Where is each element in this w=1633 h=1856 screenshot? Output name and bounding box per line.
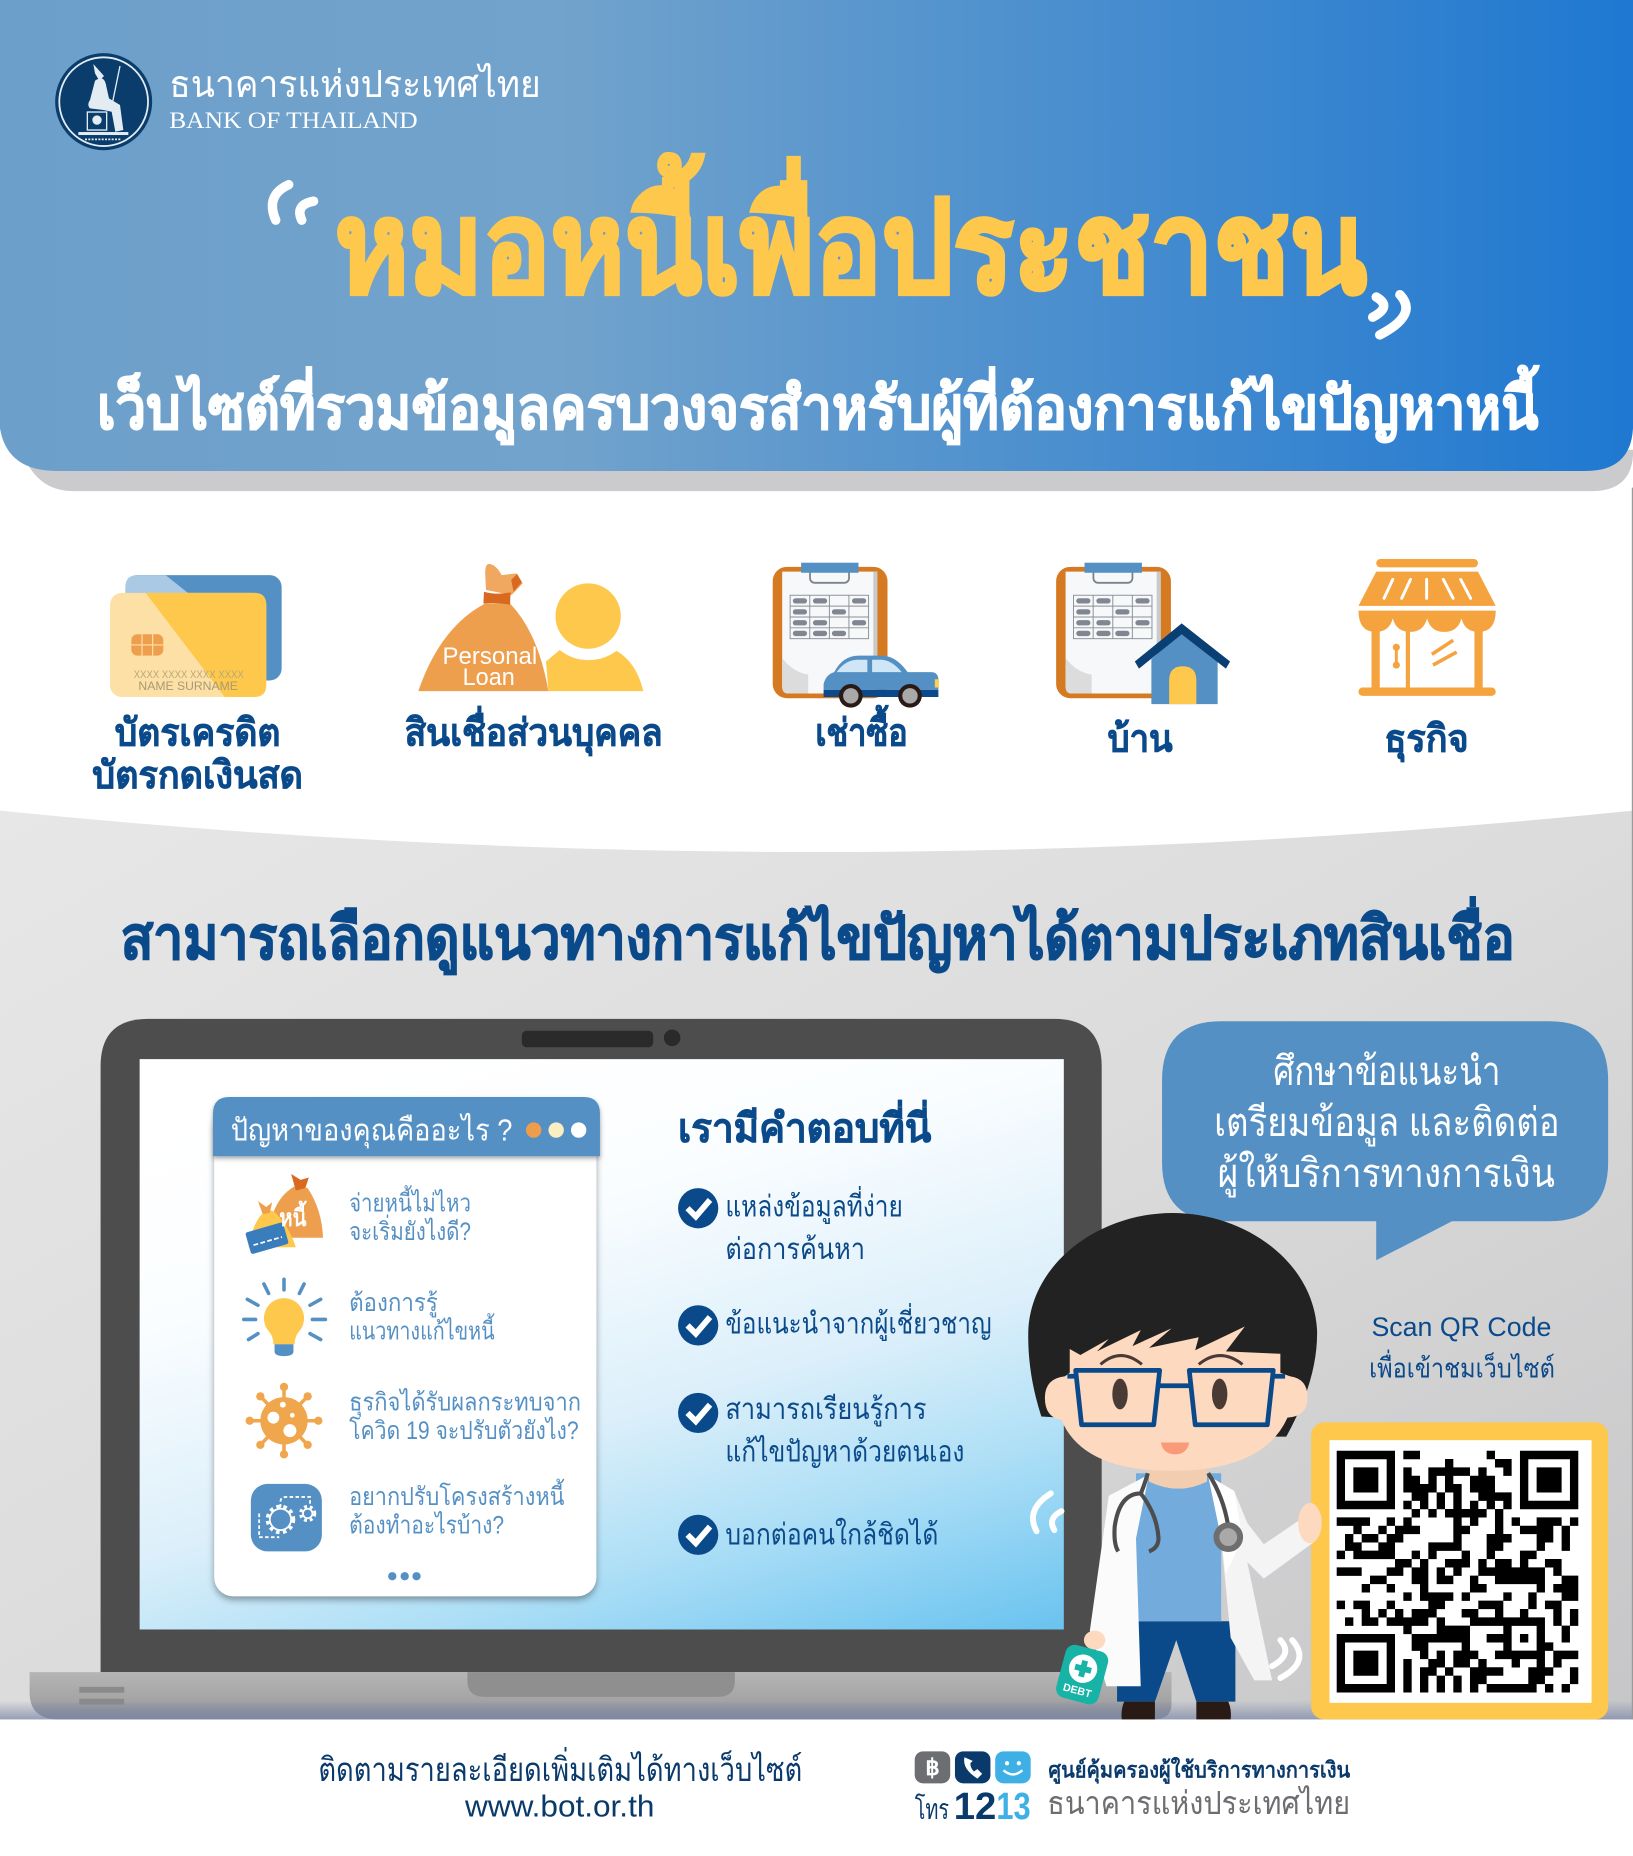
icon: phone	[955, 1751, 990, 1783]
label: hire purchase: เช่าซื้อ	[815, 705, 908, 755]
lab coat	[1090, 1474, 1316, 1686]
check item 1: ต่อการค้นหา	[725, 1233, 865, 1266]
icon: debt restructuring gears	[251, 1484, 322, 1551]
loan type: credit card	[92, 575, 303, 797]
subtitle: เว็บไซต์ที่รวมข้อมูลครบวงจรสำหรับผู้ที่ต้องการแก้ไขปัญหาหนี้	[97, 364, 1540, 444]
panel: header banner	[0, 0, 1633, 471]
title: หมอหนี้เพื่อประชาชน	[335, 152, 1367, 320]
medical bag	[1054, 1643, 1110, 1707]
opening quote mark	[272, 185, 314, 220]
label: credit card line 1: บัตรเครดิต	[115, 713, 280, 755]
footer: customer centre	[1047, 1756, 1351, 1821]
speech bubble: ผู้ให้บริการทางการเงิน	[1218, 1150, 1555, 1198]
hair	[1028, 1213, 1317, 1437]
icon: credit cards	[110, 575, 282, 697]
footer: customer centre: ศูนย์คุ้มครองผู้ใช้บริการทางการเงิน	[1048, 1756, 1351, 1784]
logo text: English bank name: BANK OF THAILAND	[169, 108, 418, 134]
mouth	[1161, 1443, 1189, 1454]
face	[1045, 1327, 1308, 1471]
laptop	[30, 1019, 1171, 1719]
speech bubble: ศึกษาข้อแนะนำ	[1273, 1049, 1500, 1094]
icon: money bag and person: Personal	[443, 644, 537, 670]
item text: restructure debt: อยากปรับโครงสร้างหนี้	[349, 1479, 565, 1511]
check item 2: ข้อแนะนำจากผู้เชี่ยวชาญ	[725, 1303, 992, 1342]
footer: hotline number: 12	[954, 1786, 996, 1828]
loan type: hire purchase	[773, 563, 939, 755]
eyebrows	[1100, 1356, 1242, 1364]
check item 2	[678, 1303, 992, 1345]
scan QR caption	[1369, 1311, 1555, 1383]
footer: website text: www.bot.or.th	[464, 1788, 654, 1823]
logo: Bank of Thailand seal	[55, 53, 152, 150]
card header title: ปัญหาของคุณคืออะไร ?	[231, 1113, 512, 1150]
icon: clipboard with house	[1056, 563, 1230, 704]
footer: hotline number: โทร	[915, 1793, 949, 1826]
icon: clipboard with car	[773, 563, 939, 708]
item text: can't pay debt: จ่ายหนี้ไม่ไหว	[349, 1186, 471, 1218]
icon: credit cards: XXXX XXXX XXXX XXXX	[134, 669, 244, 681]
footer: hotline icons	[915, 1751, 1031, 1783]
scan QR caption: Scan QR Code	[1371, 1311, 1551, 1342]
speech bubble: เตรียมข้อมูล และติดต่อ	[1214, 1100, 1560, 1147]
icon: debt bags	[245, 1174, 323, 1254]
bottom edge shading	[0, 1700, 1633, 1719]
item text: restructure debt	[349, 1479, 565, 1540]
more dots	[388, 1572, 421, 1580]
hand with bag	[1084, 1631, 1105, 1650]
panel: answers	[678, 1099, 992, 1555]
item text: want to know: ต้องการรู้	[349, 1290, 438, 1318]
right edge line	[1631, 488, 1633, 1719]
footer: hotline number	[915, 1786, 1031, 1828]
check item 3	[678, 1393, 964, 1468]
logo text: Thai bank name: ธนาคารแห่งประเทศไทย	[169, 63, 541, 106]
card header dots	[526, 1122, 586, 1138]
check item 3: สามารถเรียนรู้การ	[725, 1393, 927, 1427]
QR code	[1311, 1422, 1608, 1719]
icon: virus	[246, 1383, 322, 1458]
card body	[214, 1106, 596, 1596]
label: personal loan: สินเชื่อส่วนบุคคล	[405, 706, 663, 757]
answers heading: เรามีคำตอบที่นี่	[678, 1099, 932, 1151]
check item 4: บอกต่อคนใกล้ชิดได้	[725, 1517, 938, 1551]
laptop camera	[522, 1030, 680, 1047]
check item 3: แก้ไขปัญหาด้วยตนเอง	[725, 1434, 964, 1468]
eyes	[1112, 1379, 1227, 1409]
footer: website text: ติดตามรายละเอียดเพิ่มเติมได้ทางเว็บไซต์	[318, 1747, 802, 1789]
icon: shop front	[1358, 559, 1496, 696]
icon: light bulb	[244, 1279, 325, 1356]
icon: credit cards: NAME SURNAME	[138, 679, 238, 693]
legs	[1117, 1621, 1235, 1702]
footer: customer centre: ธนาคารแห่งประเทศไทย	[1047, 1785, 1350, 1821]
label: credit card line 2: บัตรกดเงินสด	[92, 755, 303, 797]
item text: business impacted	[349, 1388, 581, 1445]
loan type: business	[1358, 559, 1496, 762]
label: home: บ้าน	[1108, 718, 1173, 760]
loan type: home	[1056, 563, 1230, 760]
neck	[1149, 1467, 1207, 1489]
check item 1: แหล่งข้อมูลที่ง่าย	[725, 1185, 903, 1224]
shirt	[1136, 1473, 1221, 1621]
panel: problem card	[213, 1097, 600, 1596]
icon: smile	[995, 1751, 1031, 1783]
footer: website text	[318, 1747, 802, 1823]
hand on QR	[1298, 1503, 1322, 1543]
check item 4	[678, 1515, 938, 1555]
icon: baht: ฿	[925, 1755, 940, 1780]
scan QR caption: เพื่อเข้าชมเว็บไซต์	[1369, 1349, 1555, 1383]
item text: want to know	[349, 1290, 495, 1346]
icon: money bag and person: Loan	[463, 665, 515, 691]
speech bubble	[1162, 1021, 1608, 1260]
laptop screen	[140, 1059, 1064, 1629]
panel: grey lower section	[0, 811, 1633, 1719]
footer: hotline number: 13	[996, 1786, 1031, 1828]
stethoscope	[1114, 1473, 1240, 1551]
item text: business impacted: ธุรกิจได้รับผลกระทบจาก	[349, 1388, 581, 1418]
check item 1	[678, 1185, 903, 1266]
motion arcs left	[1033, 1493, 1061, 1531]
item text: restructure debt: ต้องทำอะไรบ้าง?	[349, 1511, 504, 1540]
glasses	[1067, 1370, 1285, 1425]
section heading: สามารถเลือกดูแนวทางการแก้ไขปัญหาได้ตามประเภทสินเชื่อ	[121, 897, 1515, 975]
header shadow	[21, 450, 1633, 491]
laptop lid	[101, 1019, 1102, 1672]
item text: can't pay debt	[349, 1186, 471, 1246]
medical bag: DEBT	[1062, 1681, 1093, 1701]
motion arcs right	[1272, 1640, 1299, 1678]
icon: money bag and person	[418, 564, 643, 691]
item text: business impacted: โควิด 19 จะปรับตัวยังไง?	[349, 1416, 579, 1445]
item text: want to know: แนวทางแก้ไขหนี้	[349, 1314, 495, 1346]
card header bar	[213, 1097, 600, 1156]
label: business: ธุรกิจ	[1384, 718, 1469, 762]
loan type: personal loan	[405, 564, 663, 757]
closing quote mark	[1373, 295, 1406, 335]
doctor character	[1028, 1213, 1322, 1719]
icon: debt bags: หนี้	[279, 1200, 307, 1232]
laptop base	[30, 1672, 1171, 1719]
shoes	[1122, 1702, 1231, 1719]
item text: can't pay debt: จะเริ่มยังไงดี?	[349, 1214, 471, 1246]
